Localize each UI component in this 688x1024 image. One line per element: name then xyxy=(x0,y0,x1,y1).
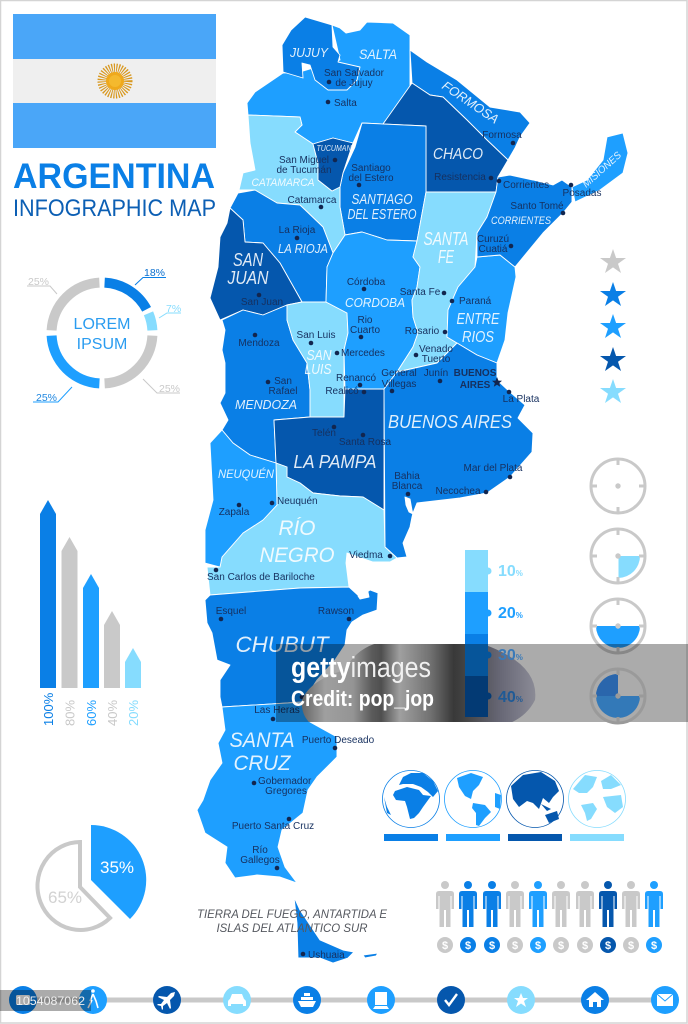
dollar coins: $ xyxy=(605,940,611,952)
percentage scale: 20% xyxy=(498,605,523,622)
dollar coins: $ xyxy=(442,940,448,952)
star legend xyxy=(600,249,626,403)
icon: walking person xyxy=(79,986,107,1014)
city labels: Necochea xyxy=(435,486,481,497)
province labels: JUJUY xyxy=(289,45,329,60)
percentage scale xyxy=(465,550,523,717)
province labels: JUAN xyxy=(227,268,269,288)
pie chart: 65% xyxy=(48,888,82,907)
city labels: Río xyxy=(252,845,268,856)
donut chart: 18% xyxy=(144,267,165,279)
province labels: CORRIENTES xyxy=(491,215,552,227)
city labels: Paraná xyxy=(459,296,492,307)
province labels: NEGRO xyxy=(260,544,334,567)
city labels: Cuarto xyxy=(350,325,380,336)
province labels: FORMOSA xyxy=(439,78,502,127)
donut chart: 25% xyxy=(28,276,49,288)
bottom icon strip xyxy=(9,986,679,1014)
globe: Americas xyxy=(444,770,502,828)
dollar coins: $ xyxy=(465,940,471,952)
arrow bar chart: 100% xyxy=(41,692,56,726)
city labels: Rosario xyxy=(405,326,440,337)
dollar coins: $ xyxy=(558,940,564,952)
donut chart: LOREM xyxy=(74,316,130,333)
arrow bar chart xyxy=(40,500,141,726)
province labels: SAN xyxy=(233,250,264,270)
city labels: General xyxy=(381,368,417,379)
city labels: Salta xyxy=(334,98,357,109)
province labels: TUCUMAN xyxy=(316,144,352,153)
city labels: AIRES xyxy=(460,380,491,391)
globe: Asia xyxy=(506,770,564,828)
icon: house xyxy=(581,986,609,1014)
city labels: Gobernador xyxy=(258,776,312,787)
city labels: Rawson xyxy=(318,606,354,617)
percentage scale labels under watermark xyxy=(498,647,523,706)
province labels: FE xyxy=(438,247,455,267)
city labels: La Rioja xyxy=(279,225,316,236)
city labels: Puerto Santa Cruz xyxy=(232,821,314,832)
city labels: La Plata xyxy=(503,394,540,405)
city labels: Tuerto xyxy=(422,354,451,365)
province labels: SAN xyxy=(306,347,332,364)
arrow bar chart: 80% xyxy=(62,700,78,726)
province labels: DEL ESTERO xyxy=(348,206,417,223)
percentage scale labels under watermark: 30% xyxy=(498,647,523,664)
title: ARGENTINA xyxy=(13,157,215,196)
province labels: SANTA xyxy=(230,729,294,752)
city labels: Esquel xyxy=(216,606,246,617)
province labels: LUIS xyxy=(304,361,332,378)
watermark band xyxy=(276,644,688,722)
watermark distortion blob xyxy=(302,644,536,722)
province labels: CHUBUT xyxy=(236,632,330,657)
icon: car xyxy=(223,986,251,1014)
province labels: SANTIAGO xyxy=(352,191,413,208)
dollar coins xyxy=(437,937,662,953)
city labels: San Miguel xyxy=(279,155,329,166)
city labels xyxy=(207,68,601,961)
globe: Africa xyxy=(382,770,440,828)
icon: star xyxy=(507,986,535,1014)
pie chart: 35% xyxy=(100,858,134,877)
city labels: Córdoba xyxy=(347,277,386,288)
province labels: RÍO xyxy=(278,517,316,540)
icon: train xyxy=(367,986,395,1014)
dollar coins: $ xyxy=(628,940,634,952)
globes xyxy=(382,770,626,841)
city labels: San Juan xyxy=(241,297,283,308)
watermark band: Credit: pop_jop xyxy=(291,686,434,711)
watermark band: gettyimages xyxy=(291,652,431,684)
city labels: Ushuaia xyxy=(308,950,345,961)
donut chart xyxy=(27,267,181,404)
province labels: CORDOBA xyxy=(345,295,405,310)
image id watermark xyxy=(0,990,91,1011)
donut chart: 25% xyxy=(36,392,57,404)
city labels: Venado xyxy=(419,344,453,355)
province labels: RIOS xyxy=(462,329,494,346)
city labels: San Carlos de Bariloche xyxy=(207,572,315,583)
clock dial: half xyxy=(591,599,645,653)
city labels: Resistencia xyxy=(434,172,486,183)
dollar coins: $ xyxy=(651,940,657,952)
city labels: San xyxy=(274,376,292,387)
Tierra del Fuego caption: ISLAS DEL ATLANTICO SUR xyxy=(216,921,368,935)
city labels: Renancó xyxy=(336,373,376,384)
province labels: MISIONES xyxy=(581,150,624,190)
dollar coins: $ xyxy=(489,940,495,952)
provinces xyxy=(197,17,628,963)
arrow bar chart: 20% xyxy=(126,700,141,726)
city labels: de Jujuy xyxy=(335,78,373,89)
clock dial: empty xyxy=(591,459,645,513)
city labels: Blanca xyxy=(392,481,423,492)
title: INFOGRAPHIC MAP xyxy=(13,195,216,222)
Tierra del Fuego caption: TIERRA DEL FUEGO, ANTARTIDA E xyxy=(197,907,388,921)
city labels: Catamarca xyxy=(288,195,337,206)
province labels: SALTA xyxy=(359,46,397,62)
city labels: Santiago xyxy=(351,163,391,174)
city labels: Curuzú xyxy=(477,234,509,245)
pie chart xyxy=(37,825,146,930)
province labels xyxy=(218,45,624,775)
clock dial: three quarters xyxy=(591,669,645,723)
city labels: Neuquén xyxy=(277,496,318,507)
province labels: LA PAMPA xyxy=(294,452,376,472)
image id watermark: 1054087062 xyxy=(16,994,85,1008)
city labels: Telén xyxy=(312,428,336,439)
globe: Atlantic xyxy=(568,770,626,828)
donut chart: 25% xyxy=(159,383,180,395)
clock dial: quarter xyxy=(591,529,645,583)
city labels: Zapala xyxy=(219,507,250,518)
city labels: Mendoza xyxy=(238,338,280,349)
flag of Argentina xyxy=(13,14,216,148)
dollar coins: $ xyxy=(535,940,541,952)
city labels: de Tucumán xyxy=(276,165,332,176)
city labels: Mercedes xyxy=(341,348,385,359)
donut chart: IPSUM xyxy=(77,336,127,353)
arrow bar chart: 40% xyxy=(105,700,120,726)
city labels: Gallegos xyxy=(240,855,280,866)
dollar coins: $ xyxy=(512,940,518,952)
map of Argentina xyxy=(197,17,628,963)
city labels: Rio xyxy=(357,315,373,326)
city labels: Las Heras xyxy=(254,705,300,716)
city labels: Posadas xyxy=(563,188,601,199)
city labels: Junín xyxy=(424,368,448,379)
province labels: CHACO xyxy=(433,146,483,163)
icon: capital star xyxy=(492,377,502,387)
city labels: Santa Rosa xyxy=(339,437,392,448)
icon: sun of May xyxy=(102,68,128,94)
city labels: del Estero xyxy=(348,173,394,184)
dollar coins: $ xyxy=(582,940,588,952)
province labels: SANTA xyxy=(424,229,468,249)
icon: check mark xyxy=(437,986,465,1014)
city labels: Mar del Plata xyxy=(464,463,523,474)
city labels: Santa Fe xyxy=(400,287,441,298)
province labels: CATAMARCA xyxy=(252,177,314,189)
icon: camera xyxy=(9,986,37,1014)
donut chart: 7% xyxy=(166,303,181,315)
percentage scale labels under watermark: 40% xyxy=(498,689,523,706)
people pictogram xyxy=(436,881,663,927)
icon: ship xyxy=(293,986,321,1014)
icon: airplane xyxy=(153,986,181,1014)
province labels: BUENOS AIRES xyxy=(388,411,513,432)
arrow bar chart: 60% xyxy=(84,700,99,726)
province labels: MENDOZA xyxy=(235,397,297,412)
city labels: San Luis xyxy=(297,330,335,341)
city labels: Puerto Deseado xyxy=(302,735,375,746)
city labels: Formosa xyxy=(482,130,522,141)
city labels: Comodoro Rivadavia xyxy=(308,693,402,704)
province labels: ENTRE xyxy=(456,311,500,328)
city labels: Viedma xyxy=(349,550,383,561)
city markers xyxy=(214,80,573,956)
city labels: Bahia xyxy=(394,471,420,482)
city labels: San Salvador xyxy=(324,68,385,79)
percentage scale: 10% xyxy=(498,563,523,580)
city labels: Cuatiá xyxy=(479,244,508,255)
city labels: Santo Tomé xyxy=(510,201,564,212)
province labels: CRUZ xyxy=(234,752,292,775)
city labels: Corrientes xyxy=(503,180,549,191)
city labels: Villegas xyxy=(382,379,416,390)
icon: envelope xyxy=(651,986,679,1014)
title xyxy=(13,157,216,222)
Tierra del Fuego caption xyxy=(197,907,388,935)
city labels: Realicó xyxy=(325,386,359,397)
province labels: NEUQUÉN xyxy=(218,466,274,481)
city labels: BUENOS xyxy=(454,368,497,379)
city labels: Rafael xyxy=(269,386,297,397)
province labels: LA RIOJA xyxy=(278,241,328,256)
city labels: Gregores xyxy=(265,786,307,797)
